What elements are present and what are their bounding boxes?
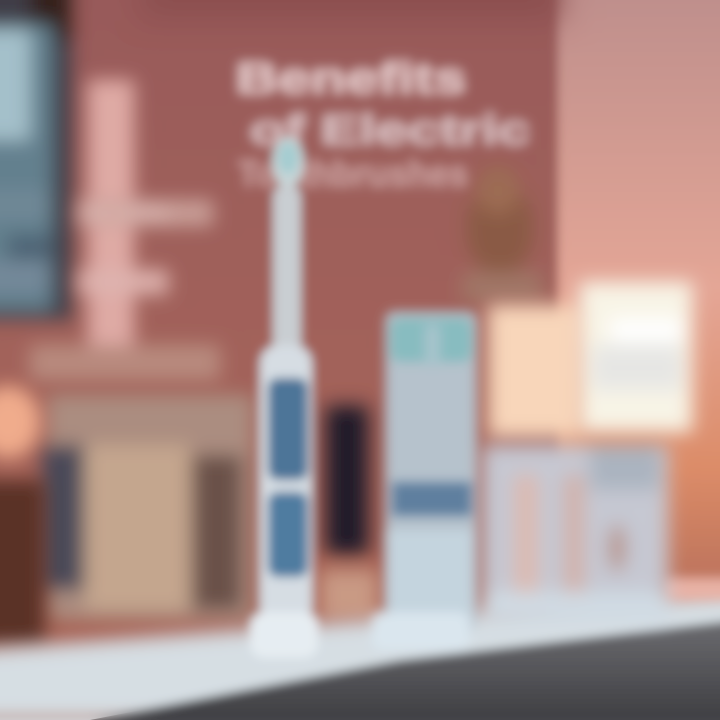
- dark object behind toothbrush: [320, 405, 378, 620]
- label text: Benefits: [82, 200, 169, 225]
- panel: dark framed poster, top left: [0, 0, 72, 320]
- electric toothbrush: [250, 137, 318, 658]
- toothpaste box: [372, 312, 476, 650]
- title: Toothbrushes: [238, 153, 468, 194]
- neck: [273, 185, 301, 355]
- title: [236, 54, 530, 194]
- far left brown object with glowing top: [0, 386, 45, 645]
- plant behind products: [462, 166, 542, 302]
- title: Benefits: [236, 54, 466, 103]
- brush head: [272, 137, 304, 187]
- peach card: [488, 305, 580, 437]
- panel: pale pink vertical banner with faint labels: [30, 80, 220, 380]
- handle: [260, 345, 312, 625]
- bright white card: [580, 282, 692, 432]
- left box: beige product box on the shelf: [42, 395, 253, 620]
- row of four toothbrush heads: [482, 445, 668, 622]
- shelf: [0, 578, 720, 720]
- title: of Electric: [250, 106, 530, 153]
